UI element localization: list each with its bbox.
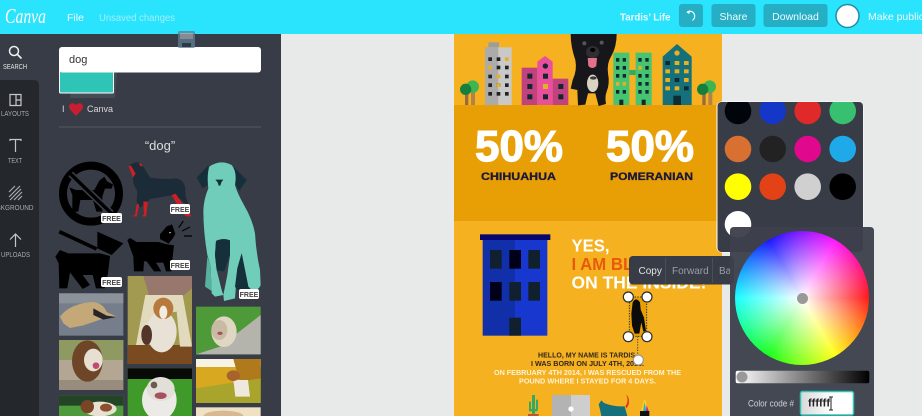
heading: yes I am blue on the inside	[572, 236, 706, 292]
panel: colour palette	[716, 98, 864, 252]
free badges: FREE	[102, 216, 121, 223]
photo: white bulldog running	[128, 368, 192, 416]
icon: floppy save indicator	[178, 31, 195, 48]
nav: uploads	[1, 234, 30, 259]
body text: hello my name is tardis: POUND WHERE I STAYED FOR 4 DAYS.	[519, 378, 656, 386]
icon: dog on leash	[55, 232, 123, 289]
icon: rottweiler	[128, 162, 192, 216]
icon: teal building	[663, 44, 692, 105]
photo: dog lying on pavement	[59, 293, 123, 336]
nav: background	[0, 186, 34, 212]
colour code input	[800, 392, 854, 415]
icon: teal sitting dog	[197, 162, 261, 301]
search box	[59, 47, 261, 72]
label: I love Canva: Canva	[87, 104, 113, 114]
status: unsaved changes: Unsaved changes	[99, 12, 175, 24]
top bar	[0, 0, 922, 34]
button: download: Download	[772, 11, 819, 23]
icon: pencil cup	[640, 400, 649, 416]
heading: yes I am blue on the inside: ON THE INSIDE!	[572, 272, 706, 292]
free badges: FREE	[171, 207, 190, 214]
title: Tardis' Life: Tardis’ Life	[620, 12, 671, 24]
panel: colour picker	[730, 227, 874, 416]
panel: infographic sheet	[454, 34, 722, 416]
logo: Canva: Canva	[5, 4, 46, 28]
button: share	[712, 4, 756, 27]
photo: french bulldog on path	[196, 307, 261, 354]
photo: running bulldog	[59, 340, 123, 390]
button: undo	[679, 4, 703, 27]
icon: no dogs sign	[63, 166, 119, 222]
toggle: make public	[836, 4, 922, 28]
button: download	[764, 4, 828, 27]
icon: cactus	[528, 395, 539, 416]
icon: barking dog	[127, 221, 192, 271]
icon: gray door	[552, 395, 590, 416]
heading: dog search results: “dog”	[145, 138, 175, 153]
toolbar: copy forward back popup: Copy	[638, 266, 662, 277]
toolbar: copy forward back popup: Back	[719, 266, 742, 277]
nav: layouts: LAYOUTS	[1, 111, 29, 118]
button: share: Share	[719, 11, 748, 23]
icon: left trees	[460, 80, 479, 105]
colour code input: ffffff	[808, 398, 830, 410]
free badges: FREE	[240, 292, 259, 299]
body text: hello my name is tardis	[494, 352, 681, 386]
toolbar: copy forward back popup: Forward	[672, 266, 709, 277]
canvas background	[281, 34, 922, 416]
nav: search	[3, 46, 27, 71]
search box: dog	[69, 54, 87, 66]
colour wheel centre knob	[796, 292, 808, 304]
nav: layouts	[1, 94, 29, 118]
body text: hello my name is tardis: I WAS BORN ON JULY 4TH, 2013.	[531, 361, 644, 368]
icon: gray tower	[485, 42, 512, 105]
nav: uploads: UPLOADS	[1, 252, 30, 259]
free badges: FREE	[102, 280, 121, 287]
menu: file: File	[67, 12, 84, 24]
nav: text	[8, 140, 23, 165]
colour wheel	[735, 231, 869, 365]
stat: 50% chihuahua: CHIHUAHUA	[481, 171, 556, 183]
illustration: city skyline with dog	[460, 34, 716, 106]
bottom icons row	[528, 394, 649, 416]
heading: yes I am blue on the inside: YES,	[572, 236, 610, 256]
body text: hello my name is tardis: ON FEBRUARY 4TH 2014, I WAS RESCUED FROM THE	[494, 370, 681, 377]
panel: editor sidebar	[0, 34, 281, 416]
selected dog element with handles	[623, 292, 652, 365]
photo: beagle in autumn field	[196, 359, 261, 403]
photo: cream puppy	[196, 407, 261, 416]
stat: 50% pomeranian: POMERANIAN	[610, 171, 693, 183]
nav: search: SEARCH	[3, 64, 27, 71]
photo: black pomeranian	[571, 34, 617, 106]
label: I love Canva: I	[62, 104, 65, 114]
free badges: FREE	[171, 263, 190, 270]
heading: yes I am blue on the inside: I AM BLUE	[572, 254, 656, 274]
colour code label: Color code #	[748, 398, 794, 408]
colour brightness slider	[736, 371, 869, 383]
icon: green twin towers	[613, 53, 652, 105]
photo grid of dogs	[59, 276, 261, 416]
icon: teal cat	[599, 394, 629, 416]
photo: person petting beagle	[128, 276, 192, 364]
stat: 50% pomeranian: 50%	[606, 122, 694, 171]
label: I love Canva	[62, 103, 113, 116]
nav: text: TEXT	[8, 158, 23, 165]
icon: pink building	[522, 56, 568, 105]
icon: right trees	[697, 80, 716, 105]
body text: hello my name is tardis: HELLO, MY NAME IS TARDIS.	[538, 352, 637, 360]
icon: blue building	[480, 234, 550, 336]
toolbar: copy forward back popup	[629, 256, 742, 284]
free badges	[101, 204, 259, 299]
stat: 50% chihuahua: 50%	[475, 122, 563, 171]
photo: bulldog on grass	[59, 396, 123, 416]
teal thumbnail card	[59, 70, 117, 98]
